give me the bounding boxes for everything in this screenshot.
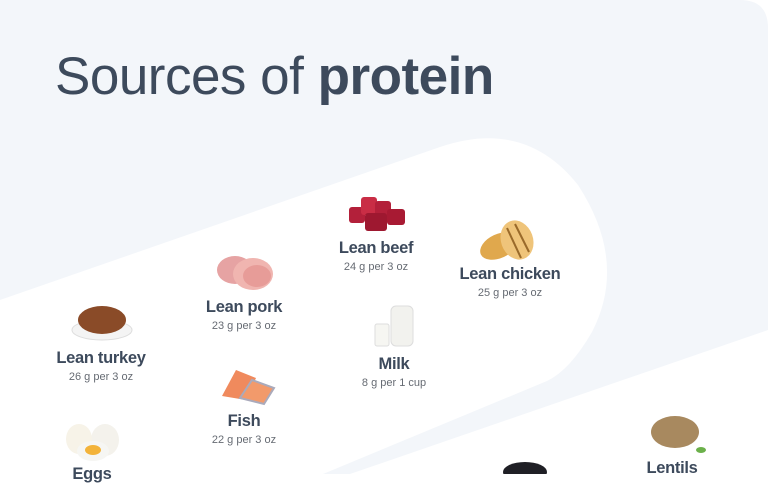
label: lean beef [339,239,414,273]
label: lean beef: 24 g per 3 oz [344,261,408,273]
icon: milk [374,306,414,346]
icon: turkey [72,306,132,340]
icon: lentils [651,416,706,453]
icon: fish [222,370,276,406]
label: fish: Fish [228,412,260,430]
label: lean chicken [460,265,560,299]
icon: chicken [480,220,534,260]
label: fish: 22 g per 3 oz [212,434,276,446]
icon: beef [349,197,405,231]
label: lean chicken: 25 g per 3 oz [478,287,542,299]
label: eggs: Eggs [72,465,112,483]
label: lean turkey: Lean turkey [56,349,146,367]
label: lean turkey: 26 g per 3 oz [69,371,133,383]
label: fish [212,412,276,446]
label: lean pork: Lean pork [206,298,282,316]
label: lean beef: Lean beef [339,239,413,257]
title: Sources of protein [55,47,494,106]
label: milk: 8 g per 1 cup [362,377,426,389]
icon: pork [217,256,273,290]
label: lean pork [206,298,282,332]
label: milk [362,355,426,389]
label: lentils: Lentils [646,459,698,477]
icon: eggs [66,424,119,461]
label: lean pork: 23 g per 3 oz [212,320,276,332]
label: milk: Milk [379,355,409,373]
label: lean turkey [56,349,146,383]
icon: beans [503,462,547,474]
label: lean chicken: Lean chicken [460,265,560,283]
